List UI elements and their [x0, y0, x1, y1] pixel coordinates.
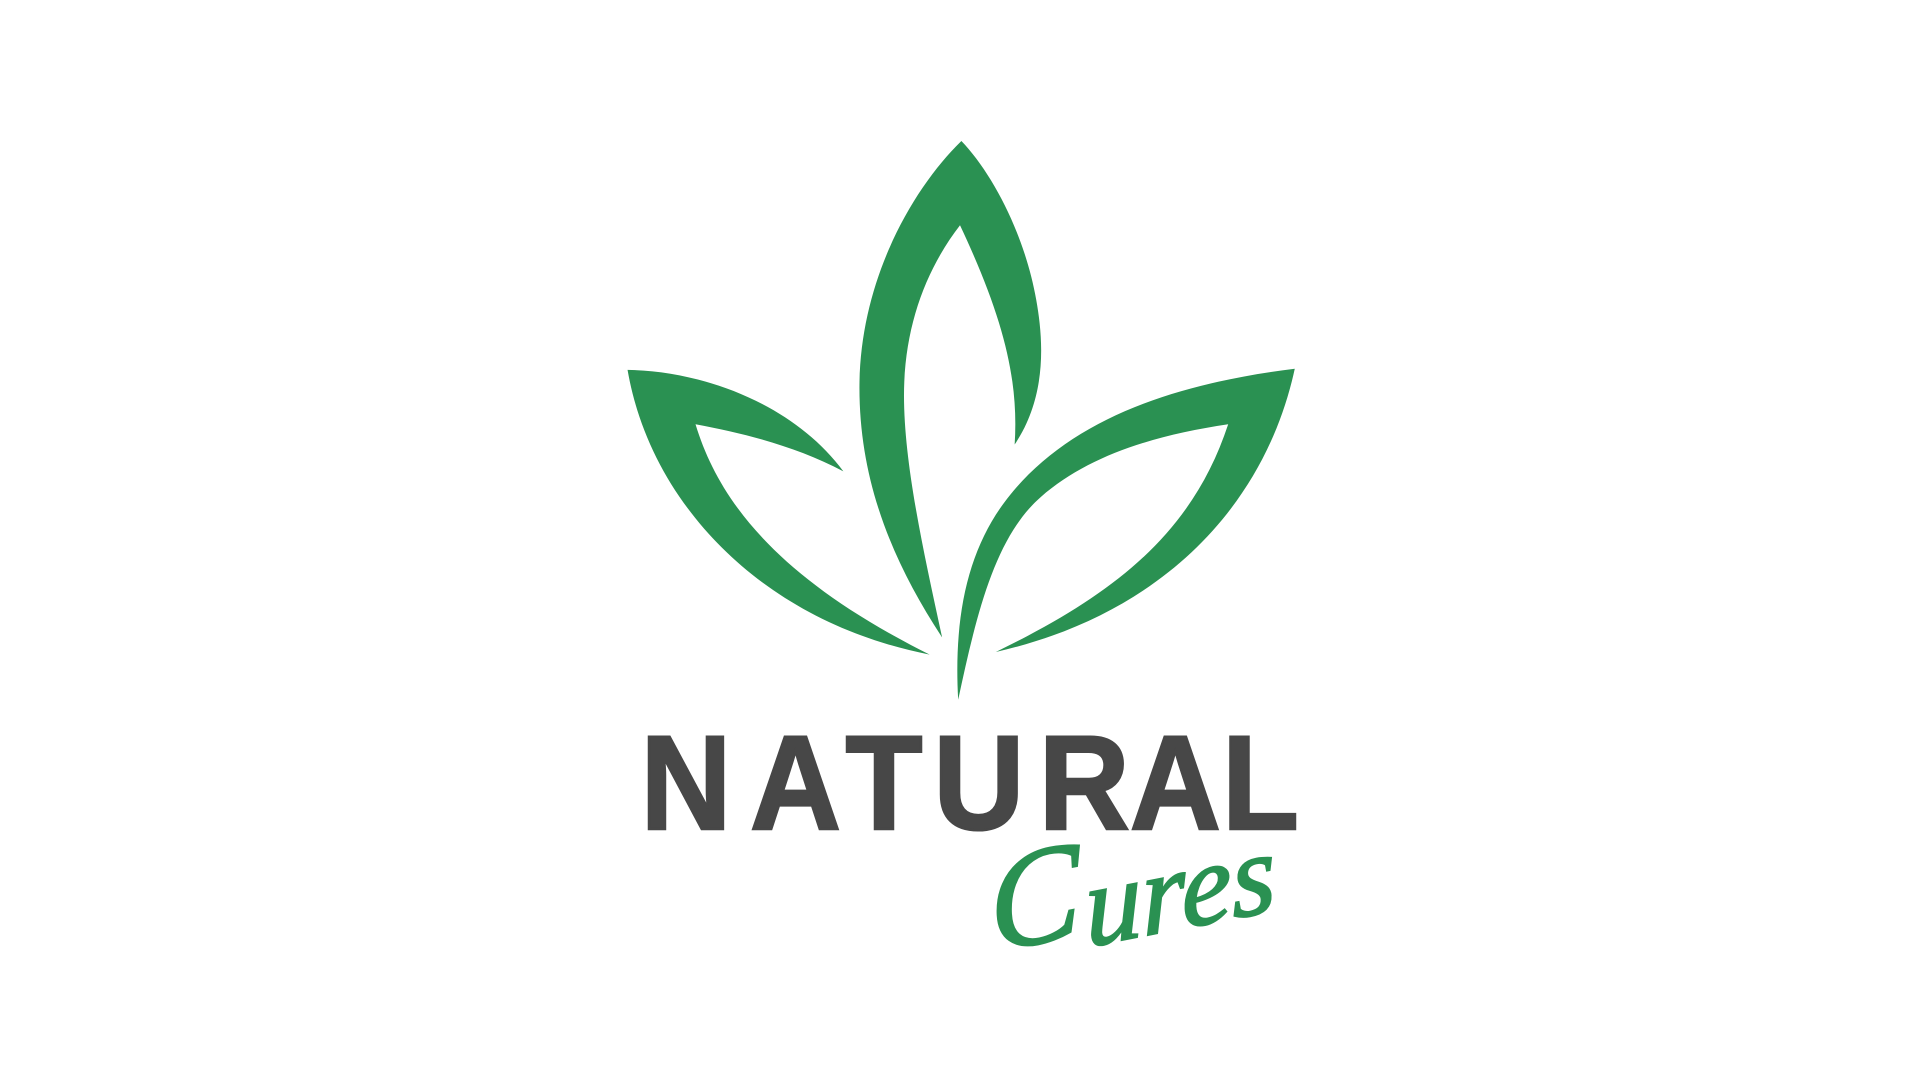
icon: centre leaf [859, 141, 1041, 637]
icon: left leaf [628, 370, 930, 655]
brand tagline: Cures: ures [1082, 806, 1278, 972]
icon: right leaf with stem [957, 369, 1295, 700]
icon: three-leaf emblem [628, 141, 1295, 700]
brand name: NATURAL: NATURAL [641, 707, 1299, 858]
brand tagline: Cures: C [985, 810, 1085, 982]
